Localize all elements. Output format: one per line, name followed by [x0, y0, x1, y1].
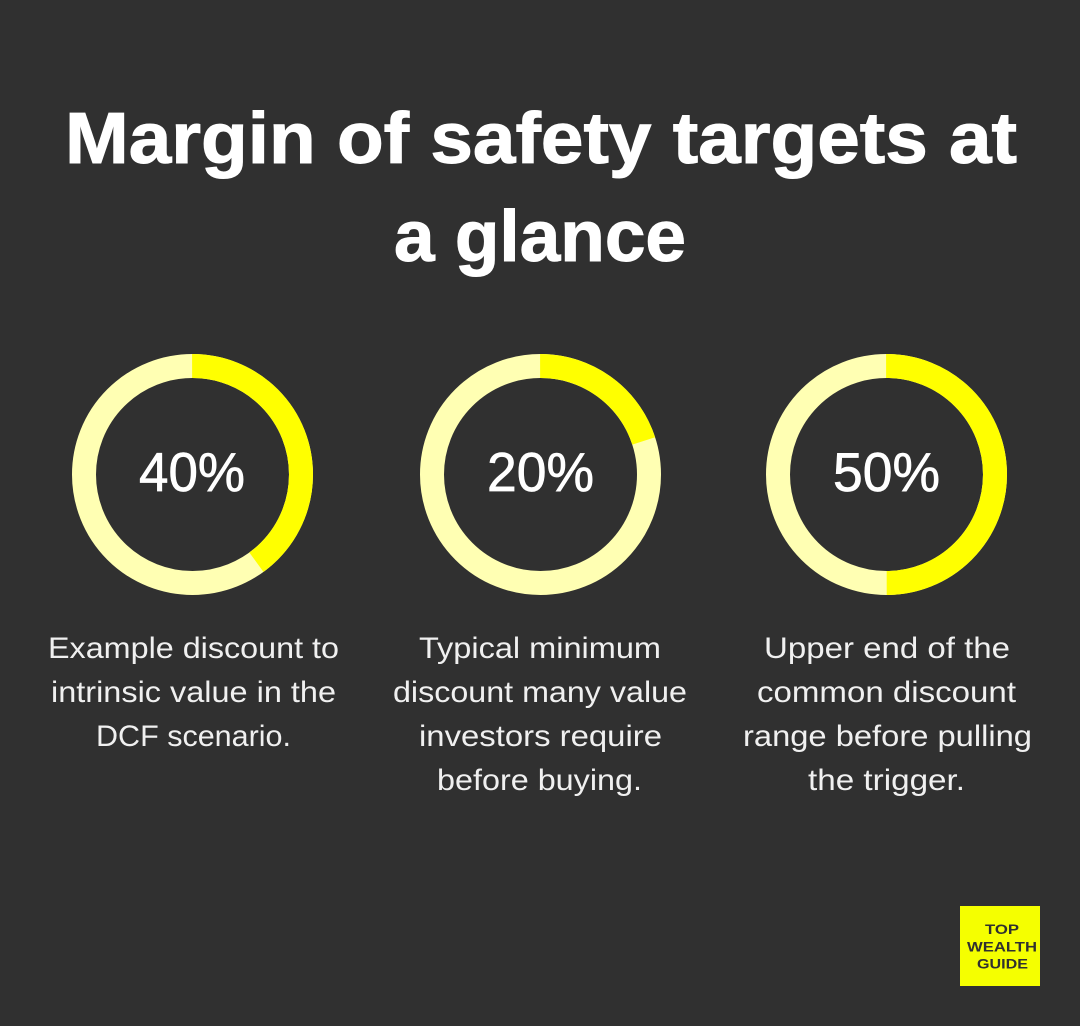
description: 40%: Example discount to — [48, 632, 339, 665]
description: 50%: the trigger. — [808, 764, 965, 797]
title: a glance — [394, 197, 686, 277]
donut chart: 50% — [778, 366, 995, 583]
panel: 40% metric — [48, 366, 339, 753]
title: Margin of safety targets at — [65, 99, 1017, 179]
description: 20% — [393, 632, 687, 797]
panel: 20% metric — [393, 366, 687, 797]
title — [65, 99, 1017, 277]
value: 20%: 20% — [487, 441, 594, 503]
logo: Top Wealth Guide: GUIDE — [977, 956, 1028, 972]
description: 20%: discount many value — [393, 676, 687, 709]
description: 40% — [48, 632, 339, 753]
logo: Top Wealth Guide: TOP — [985, 922, 1019, 937]
donut chart: 20% — [432, 366, 649, 583]
description: 40%: intrinsic value in the — [51, 676, 336, 709]
logo: Top Wealth Guide — [960, 906, 1040, 986]
panel: 50% metric — [743, 366, 1032, 797]
description: 50% — [743, 632, 1032, 797]
description: 50%: Upper end of the — [764, 632, 1010, 665]
description: 20%: Typical minimum — [419, 632, 661, 665]
description: 50%: range before pulling — [743, 720, 1032, 753]
logo: Top Wealth Guide: WEALTH — [967, 940, 1037, 954]
description: 20%: investors require — [419, 720, 662, 753]
description: 40%: DCF scenario. — [96, 720, 291, 753]
description: 20%: before buying. — [437, 764, 642, 797]
value: 40%: 40% — [139, 441, 245, 503]
description: 50%: common discount — [757, 676, 1017, 709]
donut chart: 40% — [84, 366, 301, 583]
value: 50%: 50% — [833, 441, 940, 503]
